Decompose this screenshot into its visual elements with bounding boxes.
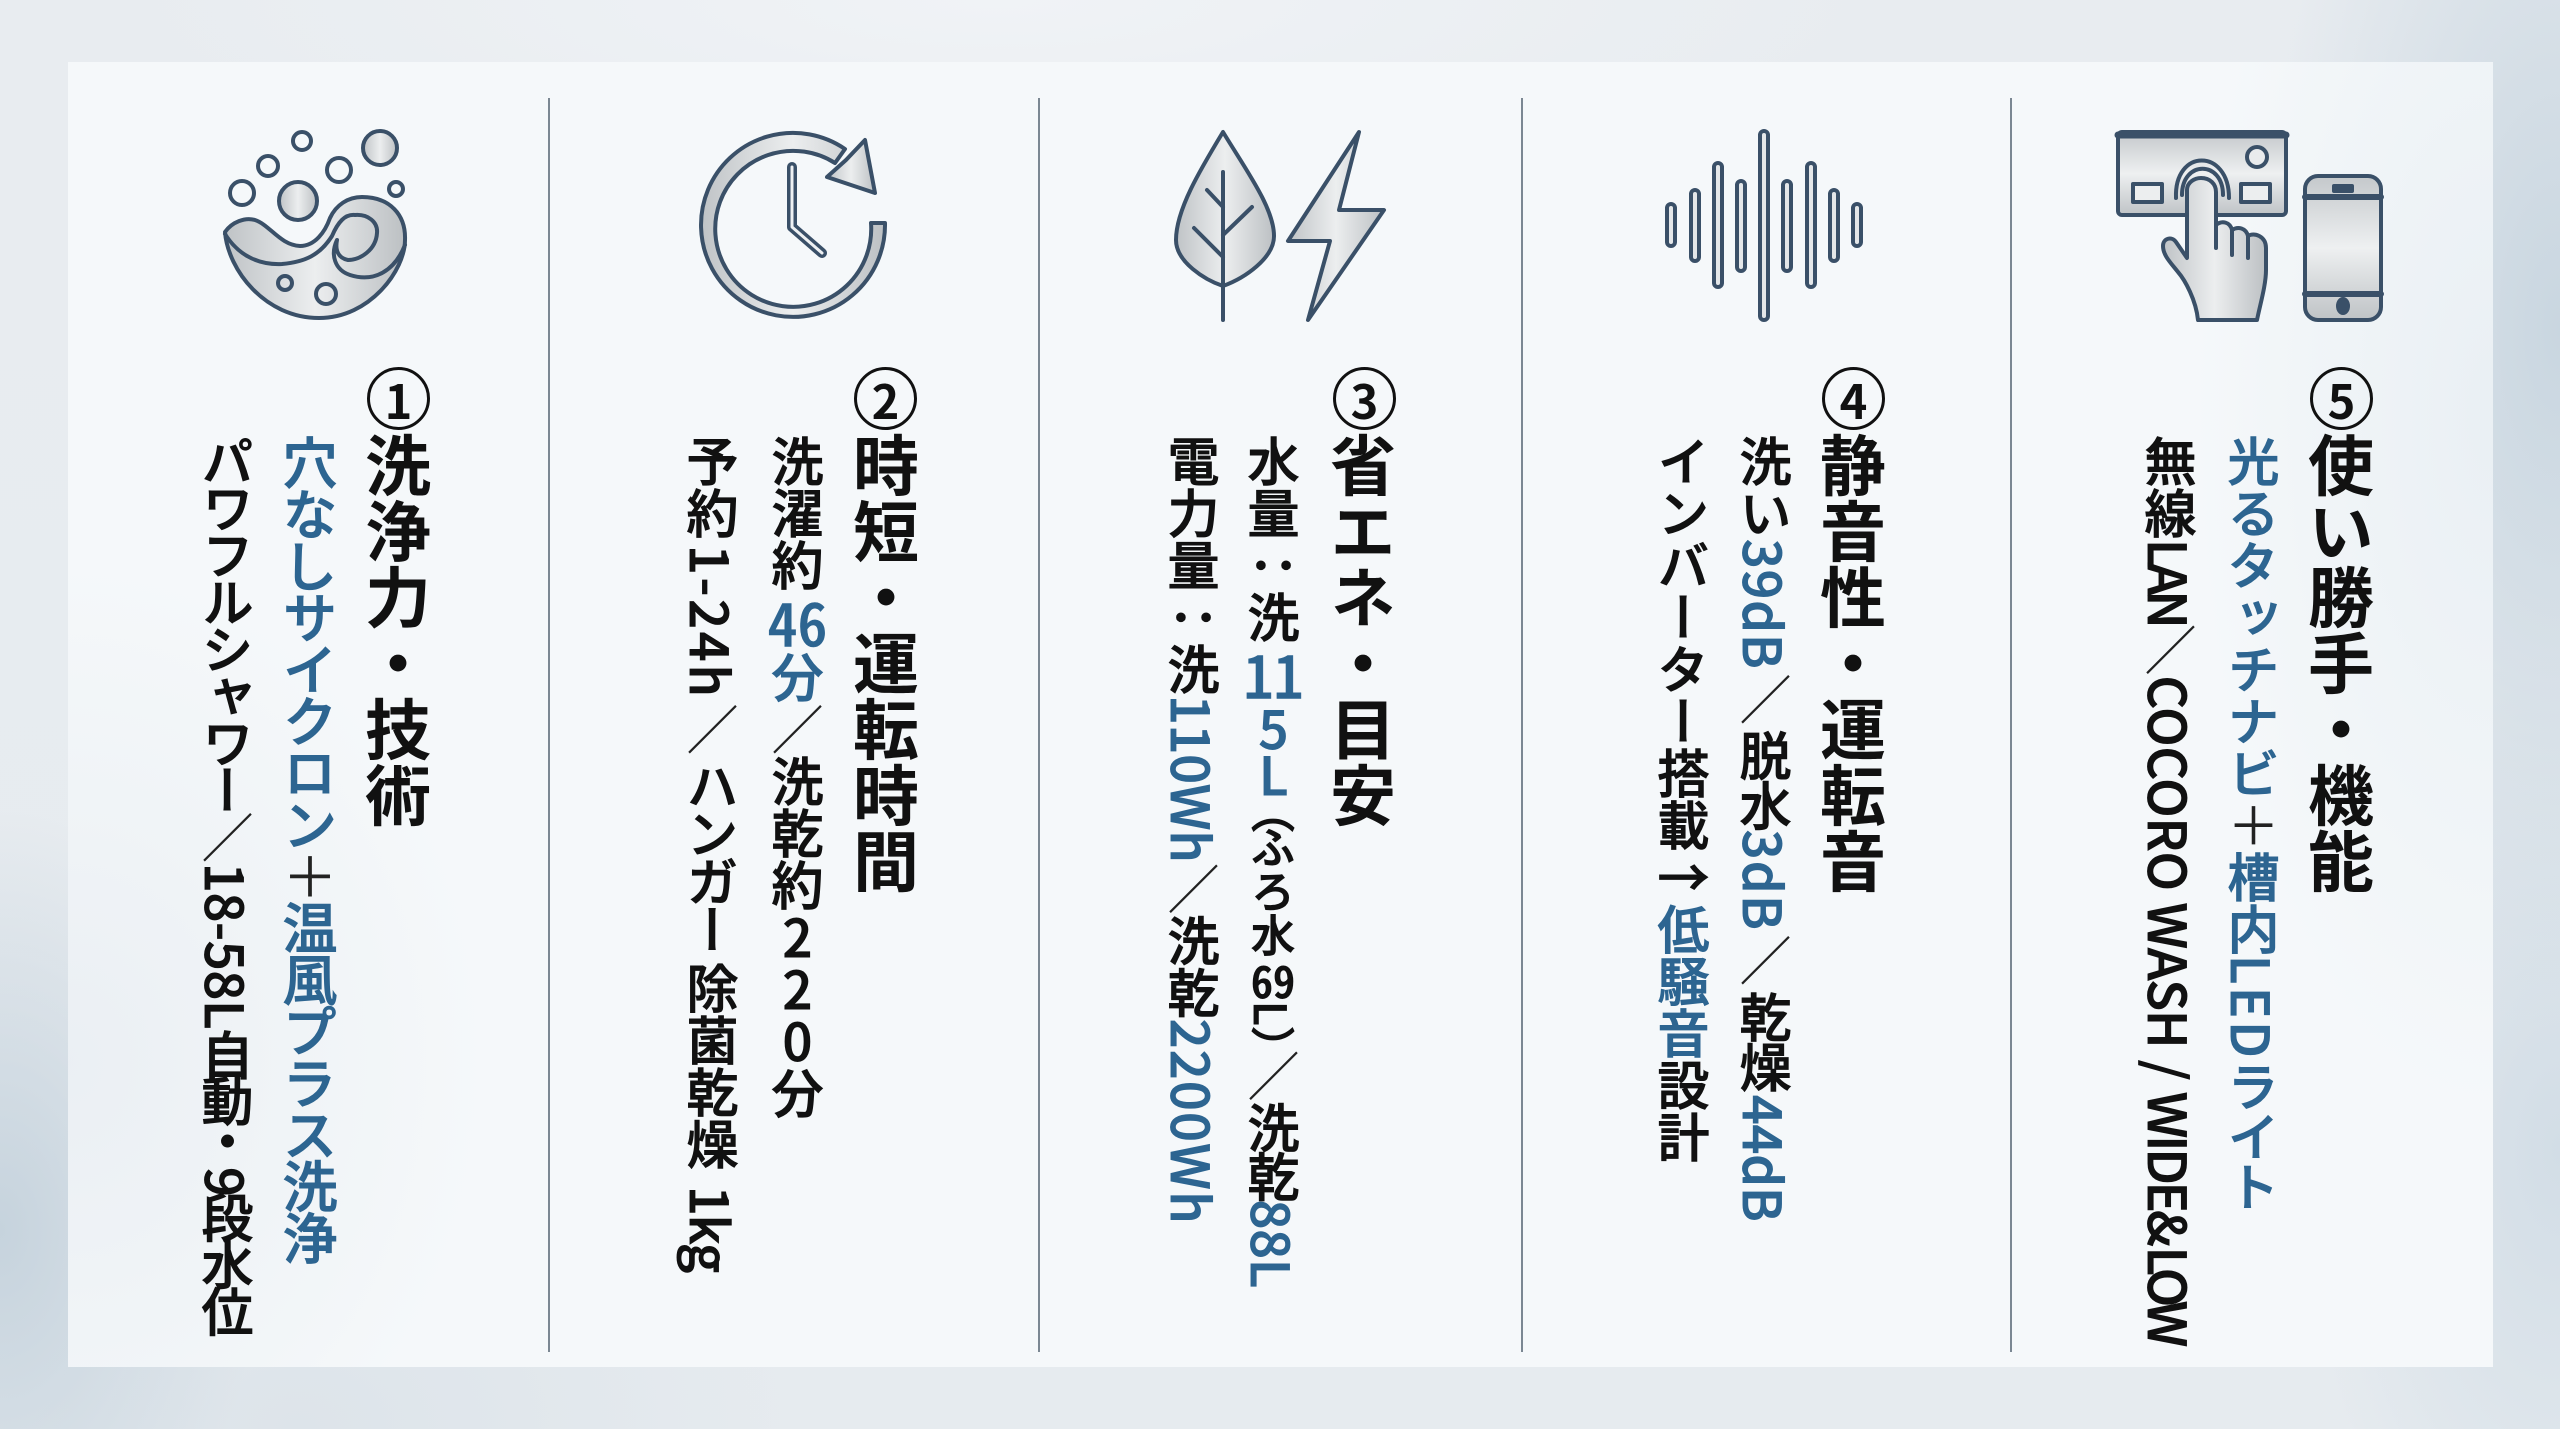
badge: number 4 [1822, 367, 1885, 430]
text: timer and hanger dry: 予約 1-24h ／ ハンガー 除菌乾燥 1kg [675, 435, 750, 1272]
text: water usage: 水量：洗 11 5L（ふろ水 69 L ）／ 洗乾 88L [1236, 435, 1311, 1288]
column 3: energy [1156, 130, 1411, 1288]
heading: 静音性・運転音: 静音性・運転音 [1805, 432, 1901, 894]
column 5: usability [2114, 130, 2389, 1346]
badge: number 5 [2310, 367, 2373, 430]
badge: number 1 [367, 367, 430, 430]
badge: number 2: 2 [872, 364, 899, 433]
text: wireless features: 無線 LAN ／ COCORO WASH / WIDE & LOW [2133, 435, 2208, 1341]
badge: number 1: 1 [385, 364, 412, 433]
divider [1038, 98, 1040, 1352]
text: decibel levels: 洗い 39dB ／ 脱水 3dB ／ 乾燥 44dB [1728, 435, 1803, 1222]
badge: number 2 [854, 367, 917, 430]
divider [548, 98, 550, 1352]
heading: 使い勝手・機能: 使い勝手・機能 [2293, 432, 2389, 894]
badge: number 3 [1333, 367, 1396, 430]
heading: 時短・運転時間: 時短・運転時間 [838, 432, 934, 894]
divider [1521, 98, 1523, 1352]
badge: number 3: 3 [1351, 364, 1378, 433]
heading: 洗浄力・技術: 洗浄力・技術 [350, 432, 446, 828]
icon: sound waveform [1665, 129, 1863, 322]
text: power usage: 電力量：洗 110Wh ／ 洗乾 2200Wh [1156, 435, 1231, 1225]
text: inverter design: インバーター搭載 → 低騒音 設計 [1646, 435, 1721, 1163]
icon: clock with arrow [699, 130, 887, 319]
column 1: cleaning power [190, 129, 446, 1336]
icon: leaf and lightning [1174, 130, 1386, 322]
divider [2010, 98, 2012, 1352]
text: shower and water level: パワフルシャワー ／ 18-58L 自動・ 9段水位 [190, 435, 265, 1333]
column 4: noise [1646, 129, 1901, 1222]
badge: number 5: 5 [2328, 364, 2355, 433]
text: wash and dry times: 洗濯約 46 分 ／ 洗乾約 220 分 [760, 435, 835, 1119]
badge: number 4: 4 [1840, 364, 1867, 433]
text: touch navigation and LED: 光るタッチナビ ＋ 槽内 LED ライト [2216, 435, 2291, 1211]
column 2: time [675, 130, 934, 1273]
icon: touch panel, hand and phone [2114, 130, 2384, 322]
heading: 省エネ・目安: 省エネ・目安 [1315, 432, 1411, 828]
text: cyclone wash: 穴なしサイクロン ＋ 温風プラス洗浄 [270, 435, 350, 1262]
icon: bubbles and wave bowl [222, 129, 408, 320]
